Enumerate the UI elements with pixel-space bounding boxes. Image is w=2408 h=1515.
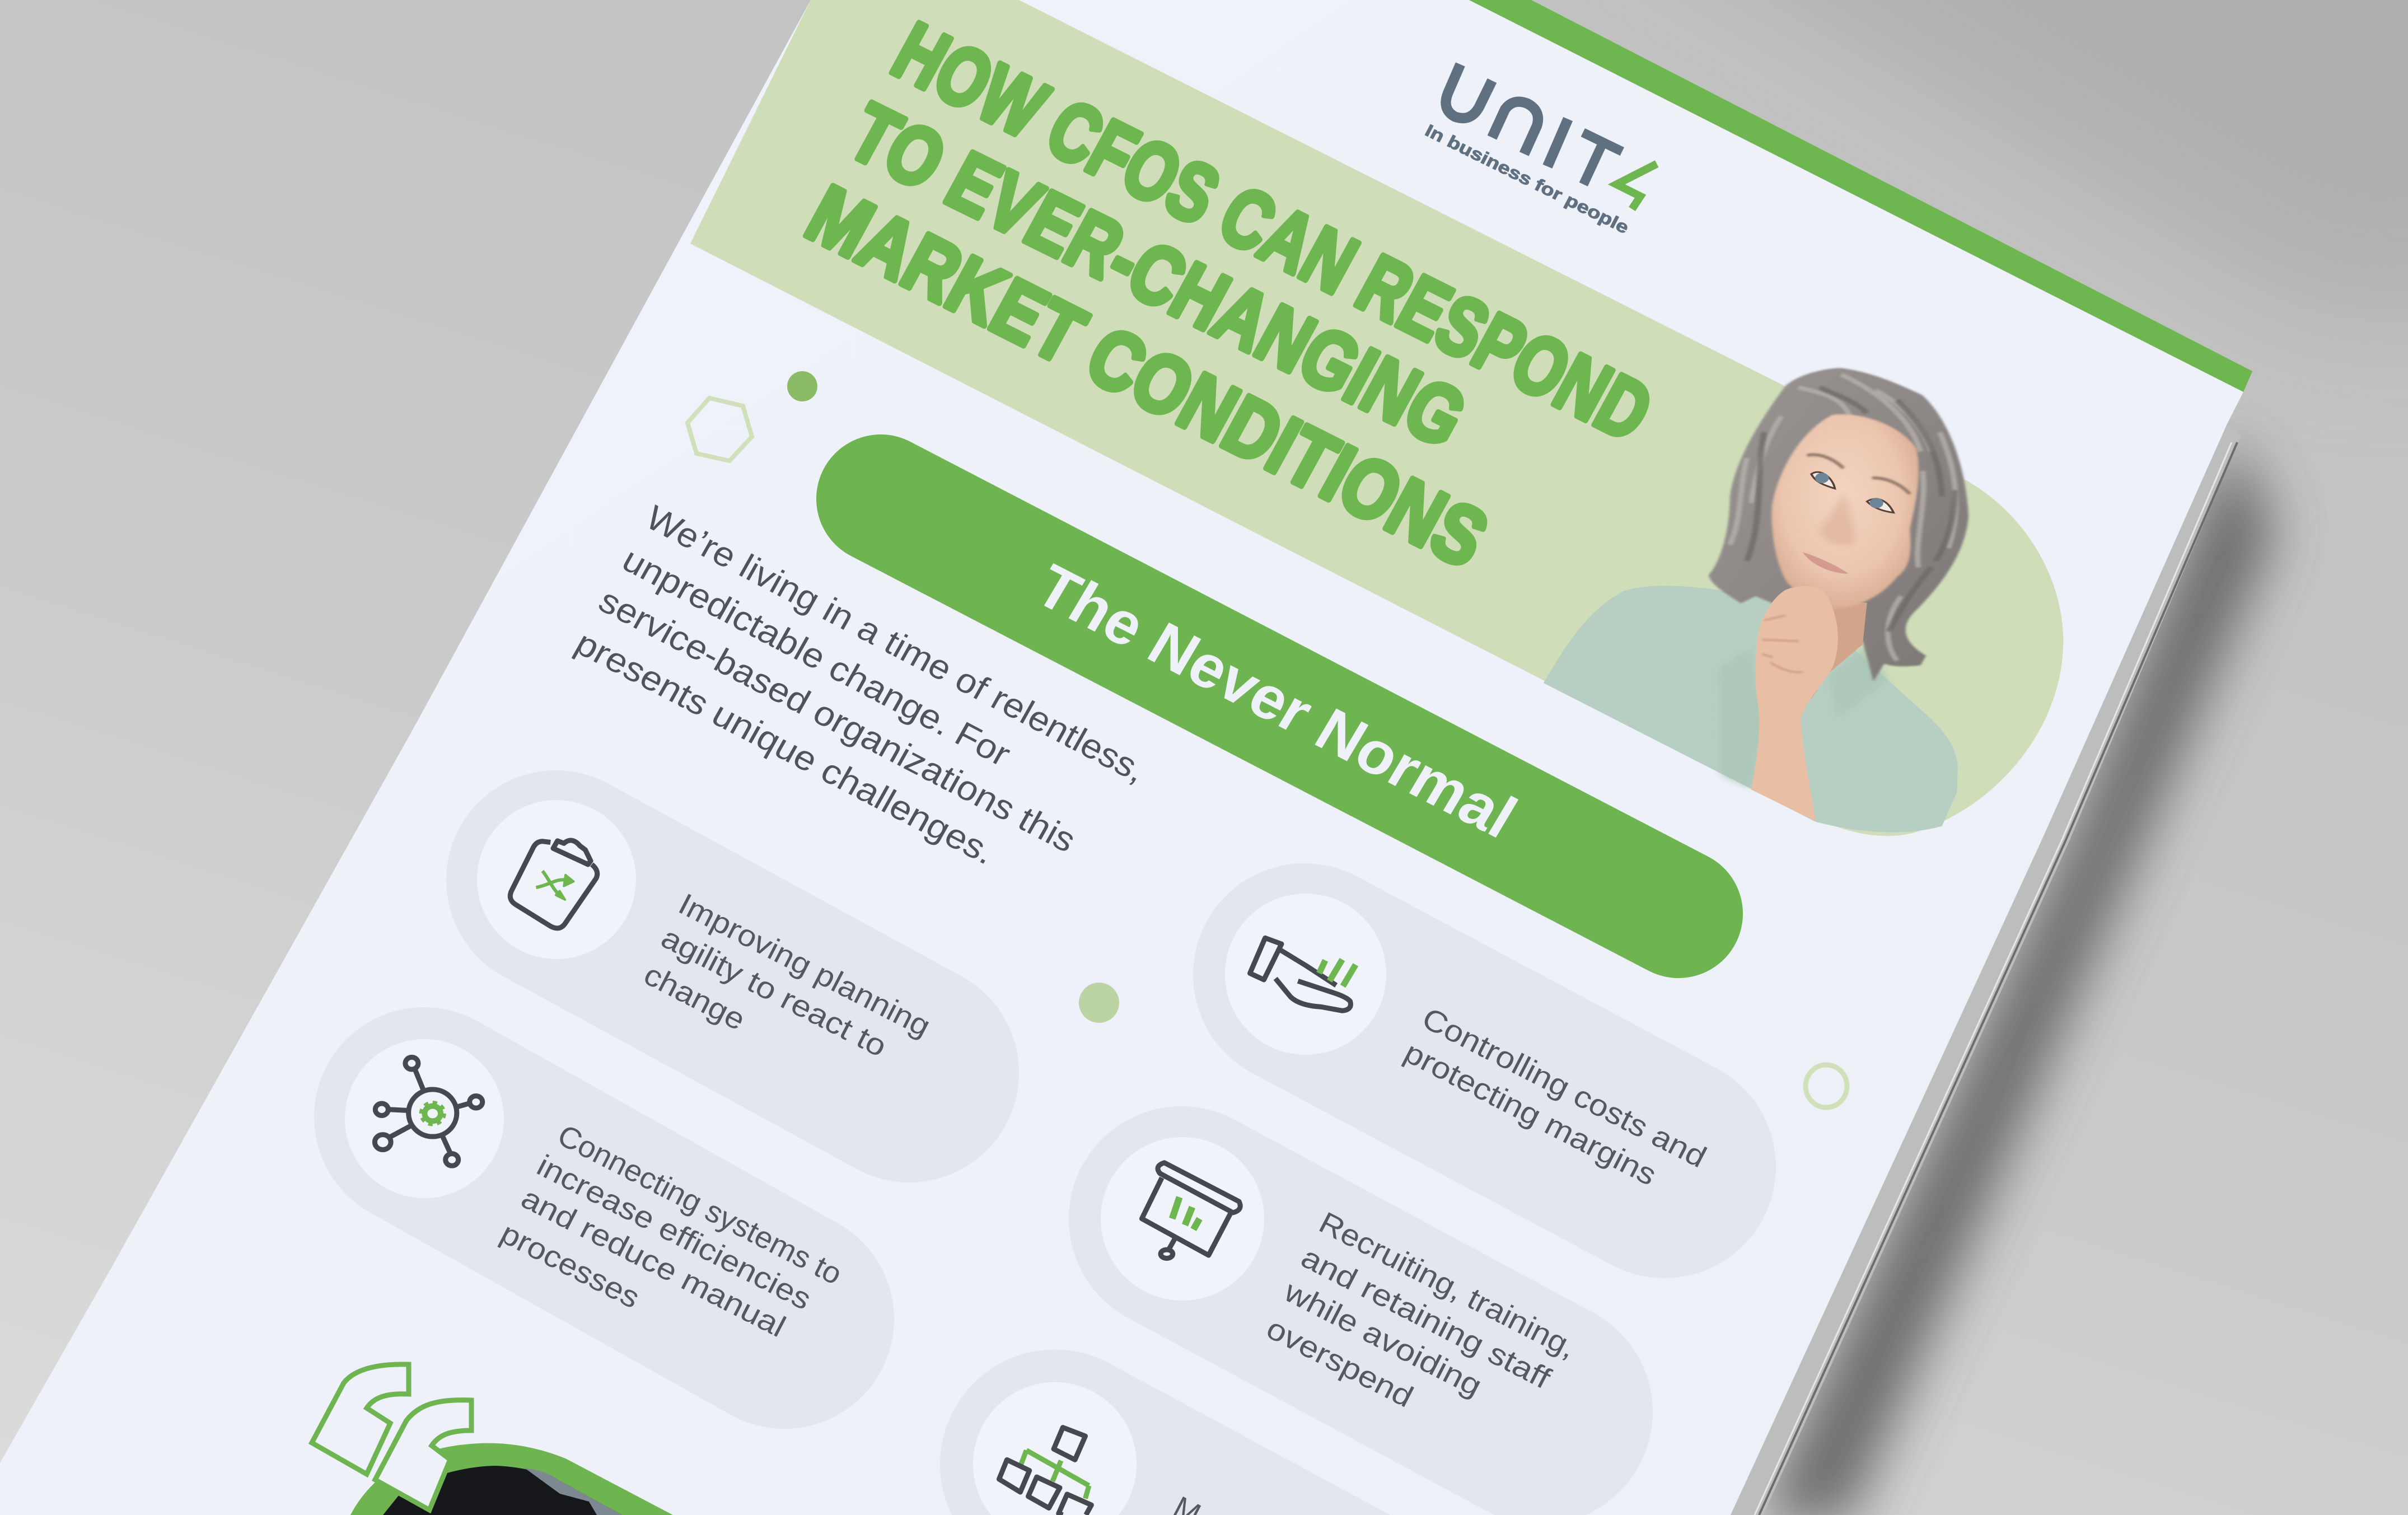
lips	[1803, 552, 1849, 574]
decorative green dot	[787, 371, 817, 401]
logo: Unit4	[1422, 64, 1657, 237]
pill text: The Never Normal	[1025, 552, 1527, 851]
title: TO EVER-CHANGING	[835, 86, 1480, 465]
quotation marks	[312, 1364, 471, 1510]
card text: processes	[495, 1216, 645, 1315]
card text: change	[638, 957, 751, 1037]
icon: presentation board	[1142, 1163, 1240, 1258]
card text: agility to react to	[656, 920, 892, 1064]
hair highlights	[1730, 375, 1956, 661]
photo: thoughtful woman	[1544, 368, 1969, 833]
card text: Improving planning	[673, 887, 936, 1044]
intro paragraph: We’re living in a time of relentless,	[639, 498, 1152, 790]
logo wordmark	[1446, 64, 1657, 209]
intro paragraph: unpredictable change. For	[616, 540, 1017, 774]
eyes	[1811, 472, 1893, 513]
title: HOW CFOS CAN RESPOND	[879, 5, 1666, 459]
top green strip	[1469, 0, 2252, 392]
card: controlling costs	[1225, 894, 1712, 1192]
decorative hexagon	[688, 398, 752, 461]
icon: org chart	[999, 1428, 1091, 1515]
card text: Controlling costs and	[1416, 1001, 1712, 1174]
card text	[1261, 1205, 1582, 1414]
intro paragraph: presents unique challenges.	[569, 624, 1002, 872]
neck	[1811, 602, 1867, 699]
top edge shadow	[1512, 0, 2408, 314]
card text	[495, 1118, 847, 1344]
title: MARKET CONDITIONS	[793, 168, 1502, 585]
decorative pale dot	[1079, 983, 1119, 1023]
quote photo frame	[350, 1443, 673, 1515]
card text: and retaining staff	[1296, 1240, 1556, 1396]
face	[1771, 414, 1919, 609]
card: connecting systems	[345, 1039, 847, 1344]
hand	[1751, 586, 1838, 821]
finger lines	[1762, 615, 1803, 672]
card: recruiting staff	[1101, 1137, 1582, 1414]
logo tagline: In business for people	[1422, 120, 1632, 237]
card text: while avoiding	[1278, 1274, 1488, 1403]
card text: increase efficiencies	[531, 1148, 817, 1316]
card text	[638, 887, 936, 1064]
icon: hand with bars	[1250, 938, 1355, 1011]
shirt	[1544, 577, 1958, 833]
decorative ring	[1806, 1065, 1847, 1107]
card text: and reduce manual	[516, 1181, 791, 1344]
card text: protecting margins	[1399, 1035, 1662, 1192]
eyebrows	[1807, 455, 1910, 494]
hair back	[1709, 368, 1969, 681]
light green header band	[690, 0, 2063, 836]
heading pill: The Never Normal	[881, 499, 1678, 914]
card text: overspend	[1261, 1311, 1419, 1414]
nose	[1820, 490, 1854, 545]
card text: Recruiting, training,	[1313, 1205, 1582, 1365]
card: improving planning	[477, 800, 936, 1073]
icon: clipboard shuffle	[510, 840, 597, 928]
card: cropped bottom item	[940, 1350, 1390, 1515]
shirt shading	[1719, 644, 1888, 789]
right side drop shadow	[1758, 437, 2273, 1515]
stacked pages edge	[1731, 424, 2241, 1515]
card text: Connecting systems to	[552, 1118, 847, 1291]
intro paragraph: service-based organizations this	[592, 581, 1082, 860]
icon: network hub gear	[375, 1057, 483, 1166]
intro paragraph	[569, 498, 1152, 872]
